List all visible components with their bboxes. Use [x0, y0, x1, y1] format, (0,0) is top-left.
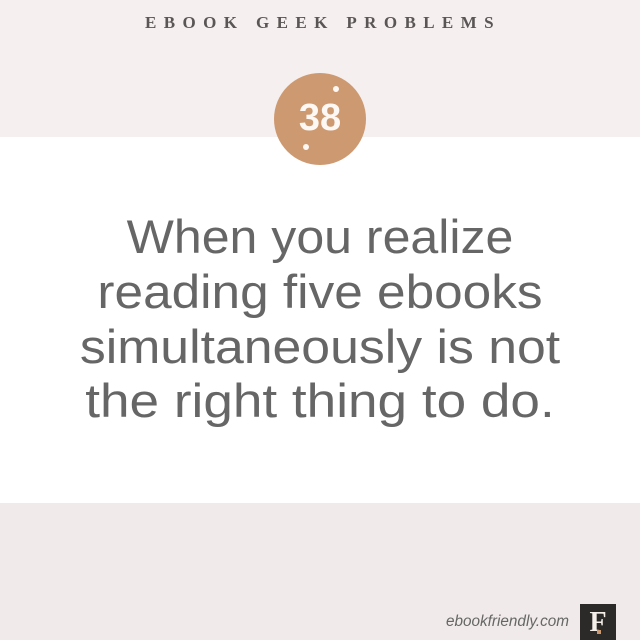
- logo box: [580, 604, 616, 640]
- logo dot: [597, 630, 601, 634]
- top background band: [0, 0, 640, 137]
- line 2: reading five ebooks: [97, 265, 543, 318]
- title: EBOOK GEEK PROBLEMS: [145, 13, 501, 32]
- main text block: [80, 210, 560, 427]
- badge dot bottom: [303, 144, 309, 150]
- line 3: simultaneously is not: [80, 320, 560, 373]
- line 1: When you realize: [127, 210, 513, 263]
- badge dot top: [333, 86, 339, 92]
- badge number: 38: [299, 97, 341, 139]
- logo letter: F: [589, 607, 607, 638]
- bottom background band: [0, 503, 640, 640]
- line 4: the right thing to do.: [85, 374, 555, 427]
- website credit: ebookfriendly.com: [446, 613, 569, 630]
- number badge: [274, 73, 366, 165]
